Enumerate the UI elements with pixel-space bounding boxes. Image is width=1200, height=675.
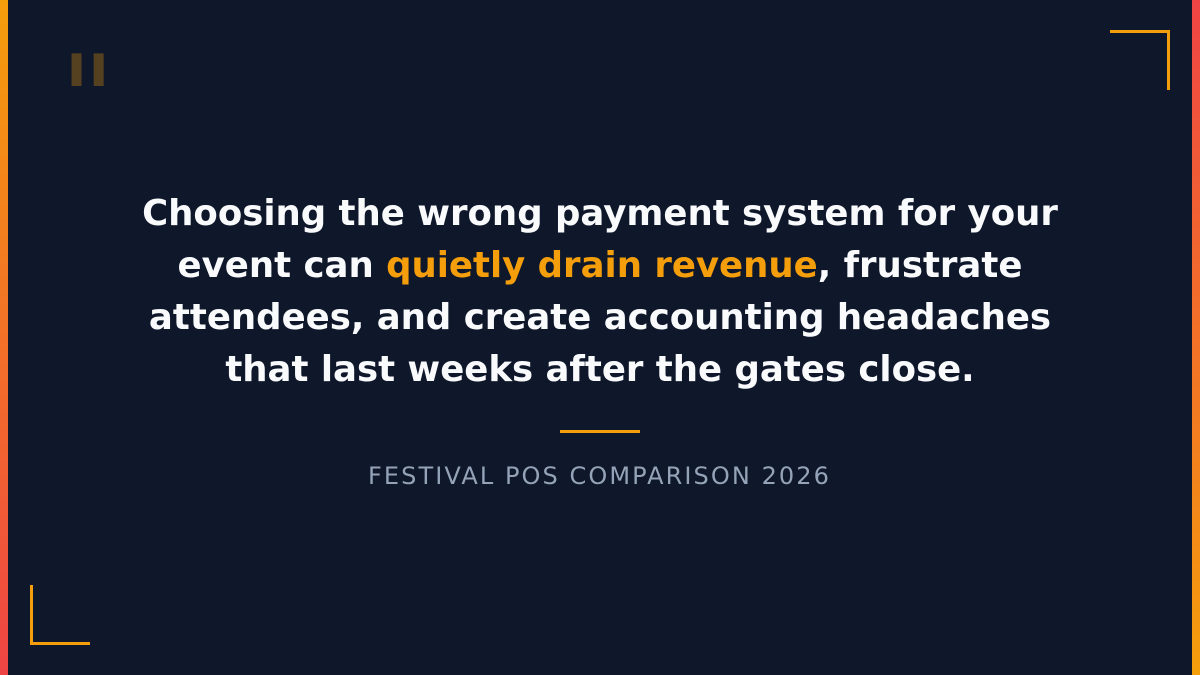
- top right corner bracket: [1110, 30, 1170, 90]
- left gradient bar: [0, 0, 8, 675]
- attribution label: FESTIVAL POS COMPARISON 2026: [368, 462, 831, 490]
- quote text: [142, 193, 1058, 390]
- quote text: that last weeks after the gates close.: [225, 349, 975, 390]
- bottom left corner bracket: [30, 585, 90, 645]
- quote text: event can quietly drain revenue, frustrate: [178, 245, 1022, 286]
- right gradient bar: [1192, 0, 1200, 675]
- quote text: attendees, and create accounting headaches: [149, 297, 1051, 338]
- decorative quotation mark: ": [60, 31, 115, 170]
- divider: [560, 430, 640, 433]
- quote text: Choosing the wrong payment system for your: [142, 193, 1058, 234]
